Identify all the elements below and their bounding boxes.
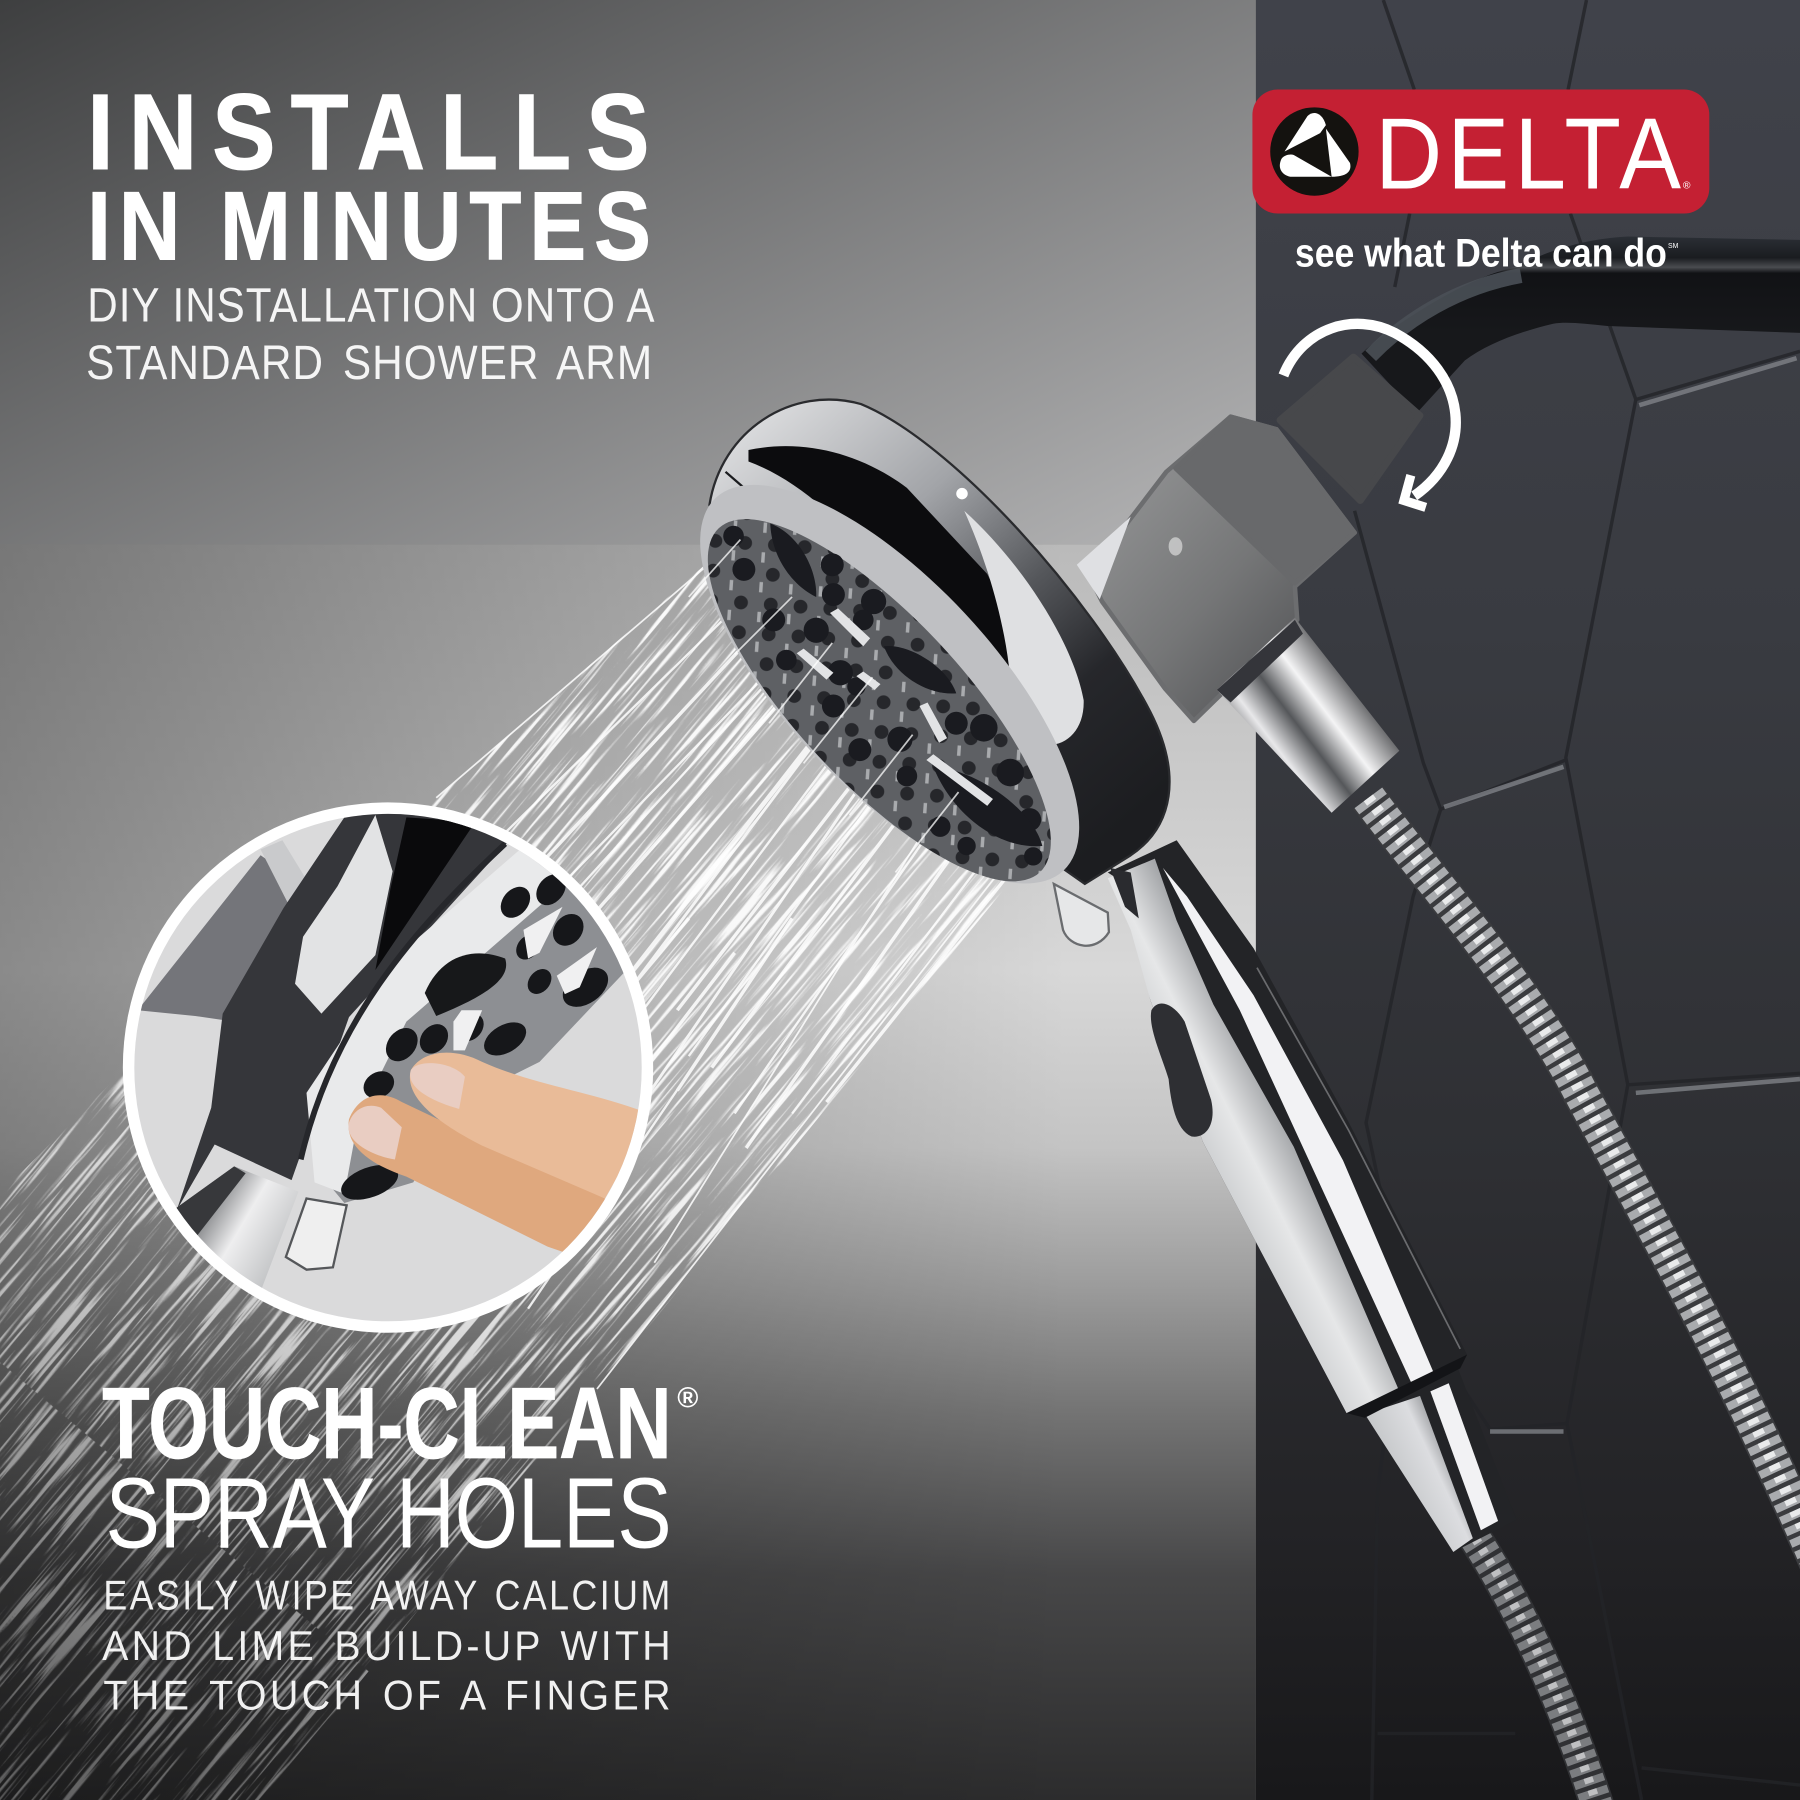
- heading: touch-clean spray holes: ®: [677, 1382, 698, 1414]
- chrome hose connector: [1217, 618, 1399, 813]
- Delta logo badge: [1252, 90, 1709, 214]
- text: easily wipe away calcium: EASILY WIPE AWAY CALCIUM: [103, 1572, 673, 1618]
- inset: shell highlight: [295, 815, 393, 1014]
- text: easily wipe away calcium: [102, 1572, 674, 1718]
- background: grey shower wall: [0, 0, 1256, 1800]
- text: DIY installation: STANDARD SHOWER ARM: [86, 336, 653, 390]
- heading: installs in minutes: IN MINUTES: [87, 171, 659, 280]
- hand shower: spray face with nozzles: [640, 427, 1139, 941]
- swivel nut: [1280, 357, 1420, 501]
- inset: light rim: [307, 849, 565, 1194]
- heading: touch-clean spray holes: SPRAY HOLES: [106, 1458, 672, 1569]
- inset: black reflection: [375, 817, 475, 970]
- inset: chrome bars: [453, 907, 597, 1050]
- text: easily wipe away calcium: THE TOUCH OF A FINGER: [103, 1672, 674, 1718]
- logo mark: black circle with white triangle: [1270, 107, 1359, 196]
- inset: diverter tab: [286, 1198, 347, 1270]
- hand shower: spray head back shell: [709, 400, 1170, 884]
- lower metal hose: [1475, 1538, 1598, 1800]
- hand shower: chrome handle: [1108, 840, 1516, 1552]
- background: dark hexagonal tile wall: [1256, 0, 1800, 1800]
- inset: handle shadow: [176, 1166, 246, 1235]
- circular inset: finger wiping spray holes: [123, 802, 653, 1333]
- inset: rim line: [301, 844, 505, 1159]
- inset: nozzle holes: [336, 868, 615, 1207]
- tagline: see what Delta can do: [1295, 230, 1667, 275]
- heading: installs in minutes: [87, 71, 665, 280]
- text: DIY installation: [86, 278, 655, 390]
- registered mark: ®: [1683, 180, 1691, 191]
- arm highlight: [1371, 276, 1521, 356]
- heading: touch-clean spray holes: TOUCH-CLEAN: [102, 1368, 672, 1480]
- shower arm: [1361, 236, 1800, 413]
- rotation arrow: [1283, 324, 1456, 507]
- inset: lower finger: [348, 1095, 605, 1260]
- swivel mount: grey ball joint: [1077, 417, 1355, 721]
- inset: upper finger: [410, 1053, 643, 1198]
- text: DIY installation: DIY INSTALLATION ONTO A: [87, 278, 655, 332]
- upper metal hose: [1368, 798, 1800, 1567]
- logo wordmark: DELTA: [1375, 98, 1686, 210]
- tagline: SM: [1668, 243, 1679, 250]
- heading: touch-clean spray holes: [102, 1368, 698, 1569]
- inset: grey mount: [140, 855, 288, 1020]
- water spray: [0, 551, 1016, 1800]
- inset: nozzle pad: [425, 953, 506, 1016]
- inset: lower fingernail: [348, 1106, 402, 1159]
- inset: dark shell: [177, 810, 507, 1210]
- text: easily wipe away calcium: AND LIME BUILD-UP WITH: [102, 1623, 674, 1669]
- inset: nozzle face: [327, 872, 643, 1203]
- diverter tab: [1054, 884, 1109, 946]
- inset: chrome handle: [176, 1166, 294, 1288]
- inset: chrome connector: [260, 840, 304, 902]
- heading: installs in minutes: INSTALLS: [87, 71, 665, 192]
- inset: upper fingernail: [410, 1063, 465, 1109]
